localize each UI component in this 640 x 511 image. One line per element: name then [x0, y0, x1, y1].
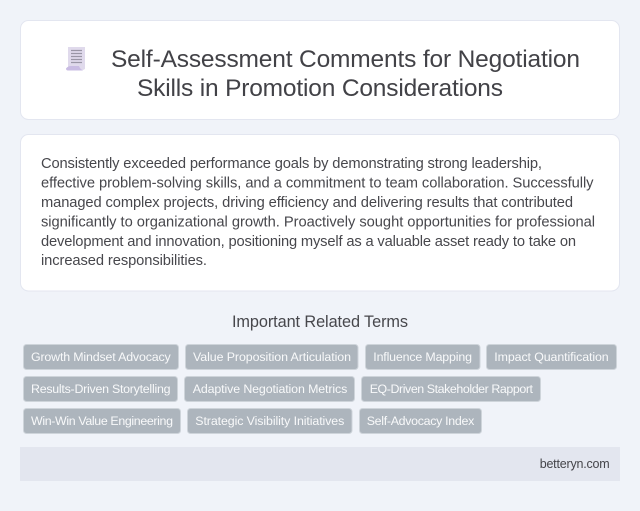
tag: Strategic Visibility Initiatives: [188, 408, 352, 434]
tag: Adaptive Negotiation Metrics: Adaptive Negotiation Metrics: [193, 382, 347, 396]
tag: Self-Advocacy Index: Self-Advocacy Index: [367, 414, 475, 428]
title: Self-Assessment Comments for Negotiation: [111, 46, 580, 73]
title: [111, 46, 580, 102]
tag group: related terms: [24, 344, 616, 434]
tag: Results-Driven Storytelling: Results-Driven Storytelling: [31, 382, 171, 396]
heading: important related terms: Important Related Terms: [232, 313, 408, 331]
tag: Win-Win Value Engineering: Win-Win Value Engineering: [31, 414, 173, 428]
tag: EQ-Driven Stakeholder Rapport: [362, 376, 540, 402]
tag: Growth Mindset Advocacy: Growth Mindset Advocacy: [31, 350, 171, 364]
tag: EQ-Driven Stakeholder Rapport: EQ-Driven Stakeholder Rapport: [370, 382, 534, 396]
panel: self-assessment paragraph: effective problem-solving skills, and a commitment to team collaboration. Successfully: [41, 176, 594, 192]
footer bar: betteryn.com: [540, 457, 610, 471]
panel: self-assessment paragraph: [20, 134, 620, 291]
panel: self-assessment paragraph: managed complex projects, driving efficiency and delivering results that contributed: [41, 195, 573, 211]
title: Skills in Promotion Considerations: [137, 75, 503, 102]
tag: Adaptive Negotiation Metrics: [184, 376, 354, 402]
tag: Win-Win Value Engineering: [24, 408, 180, 434]
panel: title card: [20, 20, 620, 120]
tag: Results-Driven Storytelling: [24, 376, 178, 402]
tag: Value Proposition Articulation: Value Proposition Articulation: [193, 350, 351, 364]
tag: Influence Mapping: [366, 344, 480, 370]
panel: self-assessment paragraph: increased responsibilities.: [41, 253, 207, 269]
tag: Growth Mindset Advocacy: [24, 344, 178, 370]
tag: Impact Quantification: Impact Quantification: [494, 350, 609, 364]
tag: Value Proposition Articulation: [186, 344, 358, 370]
tag: Self-Advocacy Index: [360, 408, 482, 434]
tag: Impact Quantification: [486, 344, 616, 370]
tag: Strategic Visibility Initiatives: Strategic Visibility Initiatives: [195, 414, 344, 428]
tag: Influence Mapping: Influence Mapping: [373, 350, 472, 364]
footer bar: [20, 447, 620, 481]
icon: document scroll: [66, 47, 85, 70]
panel: self-assessment paragraph: development and innovation, positioning myself as a valuable asset ready to take on: [41, 234, 576, 250]
panel: self-assessment paragraph: Consistently exceeded performance goals by demonstrating strong leadership,: [41, 156, 542, 172]
panel: self-assessment paragraph: significantly to organizational growth. Proactively sought opportunities for professional: [41, 214, 595, 230]
